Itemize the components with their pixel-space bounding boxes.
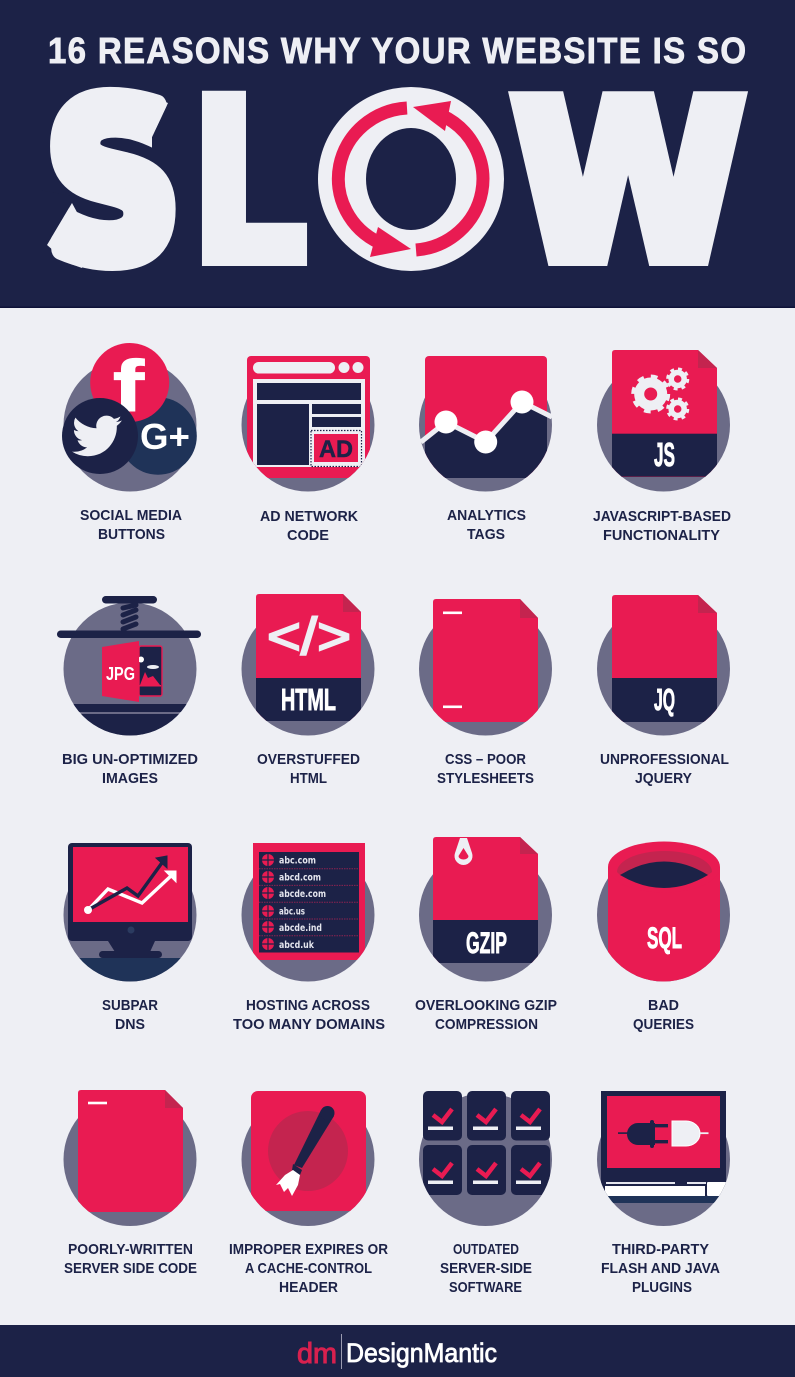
label: javascript-based functionality: JAVASCRIPT-BASED	[593, 508, 731, 525]
domain names: abc.com	[279, 856, 316, 866]
label: third-party flash and java plugins: FLASH AND JAVA	[601, 1260, 720, 1277]
label: css poor stylesheets: CSS – POOR	[445, 751, 526, 768]
label: hosting across too many domains	[233, 997, 385, 1033]
label: unprofessional jquery: JQUERY	[635, 770, 692, 787]
icon: hosting across domains list	[242, 843, 374, 982]
logo: DesignMantic: DesignMantic	[346, 1338, 497, 1368]
label: improper expires or cache-control header: HEADER	[279, 1279, 338, 1296]
big word SLOW: S	[46, 58, 180, 309]
label: unprofessional jquery: UNPROFESSIONAL	[600, 751, 729, 768]
label: improper expires or cache-control header: IMPROPER EXPIRES OR	[229, 1241, 388, 1258]
label: social media buttons	[80, 507, 182, 543]
label: overstuffed html: HTML	[290, 770, 327, 787]
icon: sql database cylinder: SQL	[647, 922, 682, 955]
logo: DesignMantic: dm	[297, 1338, 337, 1370]
icon: zipper pull	[455, 838, 472, 865]
icon: javascript file: JS	[654, 436, 675, 473]
icon: html file: HTML	[281, 682, 336, 717]
label: outdated server-side software: SERVER-SIDE	[440, 1260, 532, 1277]
label: javascript-based functionality: FUNCTIONALITY	[603, 527, 720, 544]
icon: jquery file: JQ	[654, 682, 675, 717]
label: hosting across too many domains: HOSTING ACROSS	[246, 997, 370, 1014]
big word SLOW: W	[512, 58, 744, 309]
label: big un-optimized images	[62, 751, 198, 787]
label: hosting across too many domains: TOO MANY DOMAINS	[233, 1016, 385, 1033]
title line: 16 REASONS WHY YOUR WEBSITE IS SO	[48, 32, 746, 71]
label: bad queries: QUERIES	[633, 1016, 694, 1033]
big word SLOW: L	[190, 52, 307, 314]
label: ad network code	[260, 508, 358, 544]
label: subpar dns: DNS	[115, 1016, 145, 1033]
label: third-party flash and java plugins	[601, 1241, 720, 1296]
label: poorly-written server side code	[64, 1241, 197, 1277]
icon: jquery file	[597, 595, 730, 736]
icon: flash and java plugins laptop	[595, 1091, 735, 1226]
header panel	[0, 0, 795, 314]
label: ad network code: AD NETWORK	[260, 508, 358, 525]
label: improper expires or cache-control header	[229, 1241, 388, 1296]
icon: sql database cylinder	[597, 842, 730, 987]
icon: javascript file	[597, 350, 730, 492]
icon: ad network code: AD	[319, 436, 353, 463]
big word SLOW	[40, 52, 744, 314]
icon: plug	[618, 1120, 708, 1148]
label: analytics tags	[447, 507, 526, 543]
label: css poor stylesheets	[437, 751, 534, 787]
label: big un-optimized images: IMAGES	[102, 770, 158, 787]
label: outdated server-side software: OUTDATED	[453, 1241, 519, 1258]
label: third-party flash and java plugins: THIRD-PARTY	[612, 1241, 709, 1258]
label: overlooking gzip compression: COMPRESSION	[435, 1016, 538, 1033]
icon: cache broom	[242, 1091, 374, 1226]
label: subpar dns: SUBPAR	[102, 997, 158, 1014]
label: unprofessional jquery	[600, 751, 729, 787]
label: social media buttons: BUTTONS	[98, 526, 165, 543]
logo: DesignMantic	[297, 1334, 497, 1370]
label: bad queries: BAD	[648, 997, 679, 1014]
domain names: abcde.com	[279, 889, 326, 900]
icon: social media buttons	[62, 343, 197, 492]
label: social media buttons: SOCIAL MEDIA	[80, 507, 182, 524]
label: css poor stylesheets: STYLESHEETS	[437, 770, 534, 787]
label: bad queries	[633, 997, 694, 1033]
label: analytics tags: TAGS	[467, 526, 505, 543]
domain names	[279, 856, 326, 951]
icon: subpar dns monitor	[60, 843, 200, 984]
icon: outdated software tiles	[419, 1091, 552, 1226]
label: outdated server-side software	[440, 1241, 532, 1296]
label: ad network code: CODE	[287, 527, 329, 544]
icon: big un-optimized images press: JPG	[106, 664, 135, 684]
domain names: abc.us	[279, 906, 305, 918]
label: javascript-based functionality	[593, 508, 731, 544]
label: overstuffed html	[257, 751, 360, 787]
label: improper expires or cache-control header: A CACHE-CONTROL	[245, 1260, 372, 1277]
icon: circular arrows in the O	[338, 101, 483, 257]
icon: big un-optimized images press	[55, 596, 205, 744]
label: analytics tags: ANALYTICS	[447, 507, 526, 524]
icon: server side code file	[64, 1090, 196, 1226]
icon: social media buttons: f	[113, 347, 145, 427]
label: overstuffed html: OVERSTUFFED	[257, 751, 360, 768]
label: third-party flash and java plugins: PLUGINS	[632, 1279, 692, 1296]
label: poorly-written server side code: POORLY-WRITTEN	[68, 1241, 193, 1258]
label: outdated server-side software: SOFTWARE	[449, 1279, 522, 1296]
icon: gears	[634, 369, 688, 419]
icon: analytics tags	[419, 356, 552, 492]
domain names: abcd.com	[279, 872, 321, 884]
icon: social media buttons: G+	[140, 416, 190, 457]
icon: html file: </>	[267, 608, 351, 666]
label: big un-optimized images: BIG UN-OPTIMIZED	[62, 751, 198, 768]
icon: ad network code	[242, 356, 374, 492]
label: poorly-written server side code: SERVER SIDE CODE	[64, 1260, 197, 1277]
icon: gzip file: GZIP	[466, 927, 507, 960]
icon: html file	[242, 594, 374, 736]
label: overlooking gzip compression	[415, 997, 557, 1033]
big word SLOW: O	[326, 56, 496, 312]
domain names: abcd.uk	[279, 940, 314, 951]
icon: gzip file	[419, 837, 552, 982]
domain names: abcde.ind	[279, 923, 322, 934]
footer panel	[0, 1325, 795, 1377]
icon: css file	[419, 599, 552, 736]
label: overlooking gzip compression: OVERLOOKING GZIP	[415, 997, 557, 1014]
label: subpar dns	[102, 997, 158, 1033]
